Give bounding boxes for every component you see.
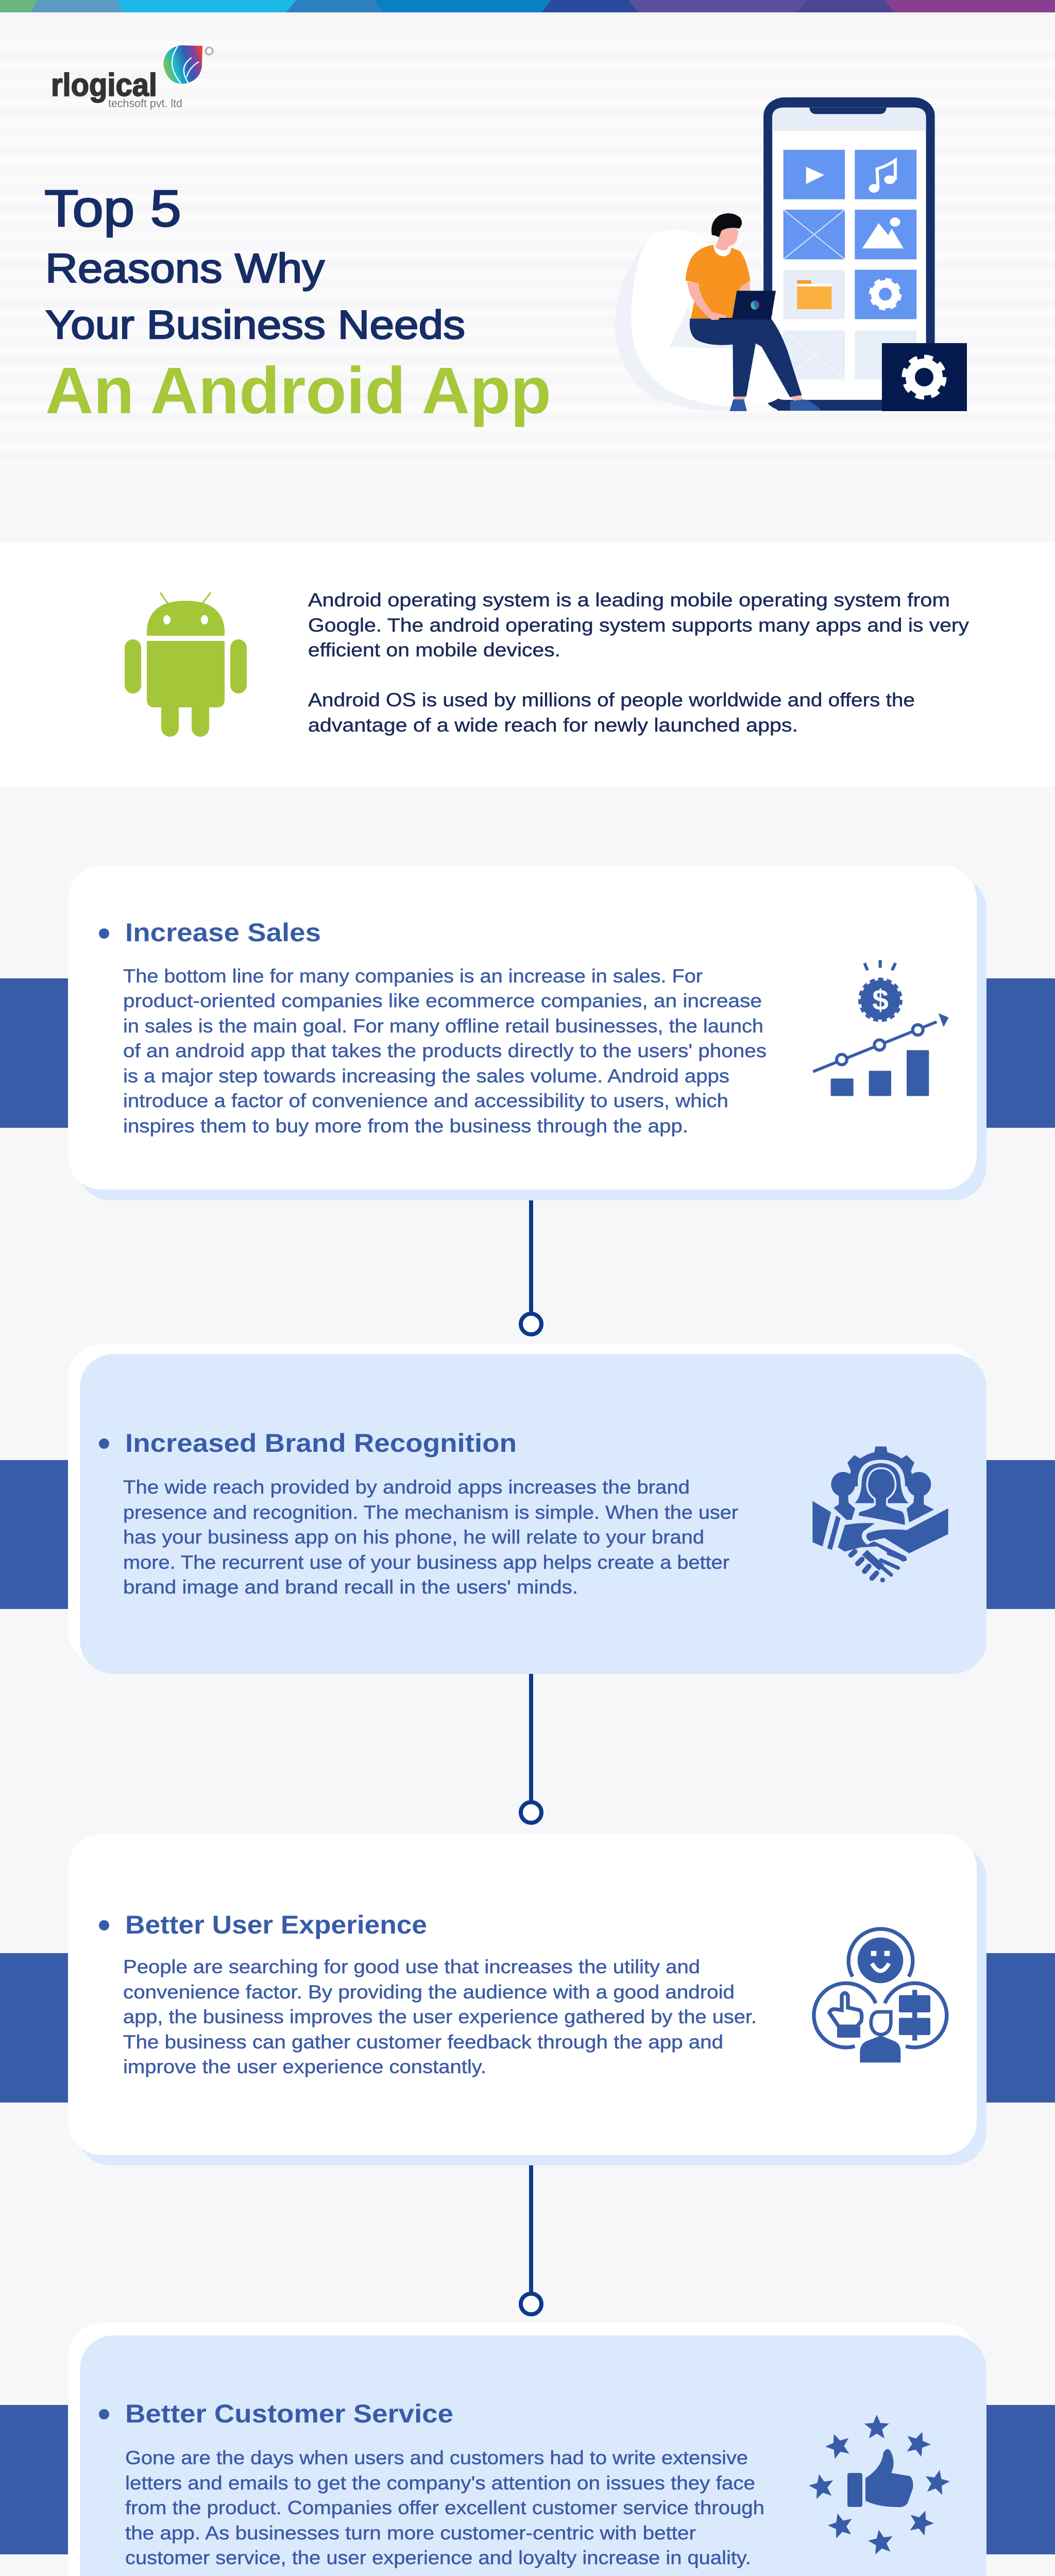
title: Your Business Needs — [45, 302, 465, 347]
body text: increase sales: is a major step towards increasing the sales volume. Android apps — [123, 1065, 729, 1087]
body text: user experience: app, the business improves the user experience gathered by the user. — [123, 2006, 757, 2027]
icon: thumbs up with stars — [807, 2415, 952, 2555]
settings box — [882, 343, 967, 411]
body text: user experience — [123, 1956, 757, 2077]
intro text: advantage of a wide reach for newly launched apps. — [308, 715, 798, 736]
body text: customer service: customer service, the user experience and loyalty increase in quality. — [125, 2547, 751, 2568]
heading: user experience: Better User Experience — [125, 1910, 427, 1939]
body text: customer service — [125, 2447, 764, 2568]
panel: increased brand recognition — [0, 1344, 1055, 1674]
top colour stripe — [0, 0, 1055, 12]
body text: brand recognition: has your business app on his phone, he will relate to your brand — [123, 1527, 704, 1548]
body text: brand recognition: presence and recognition. The mechanism is simple. When the user — [123, 1502, 738, 1523]
icon: user experience — [814, 1929, 947, 2062]
gear in phone tile — [871, 280, 900, 309]
body text: increase sales: introduce a factor of convenience and accessibility to users, which — [123, 1090, 728, 1111]
body text: customer service: letters and emails to get the company's attention on issues they face — [125, 2472, 755, 2494]
intro text: Android OS is used by millions of people worldwide and offers the — [308, 689, 915, 710]
icon: sales growth chart — [813, 960, 949, 1096]
logo: rlogical: techsoft pvt. ltd — [108, 97, 182, 110]
icon: android robot — [125, 592, 247, 737]
heading: brand recognition: Increased Brand Recognition — [125, 1429, 517, 1458]
body text: user experience: People are searching for good use that increases the utility and — [123, 1956, 700, 1977]
panel: better user experience — [0, 1834, 1055, 2165]
bean bag — [615, 230, 784, 411]
title — [44, 180, 551, 428]
connector 2 — [521, 1674, 541, 1823]
icon: team handshake — [812, 1447, 948, 1582]
body text: brand recognition: brand image and brand recall in the users' minds. — [123, 1577, 578, 1598]
panel: increase sales — [0, 866, 1055, 1200]
logo: rlogical: rlogical — [51, 67, 157, 103]
body text: brand recognition: more. The recurrent use of your business app helps create a better — [123, 1552, 729, 1573]
connector 1 — [521, 1200, 541, 1334]
icon: sales growth chart: $ — [872, 985, 889, 1017]
body text: increase sales: product-oriented companies like ecommerce companies, an increase — [123, 990, 762, 1011]
connector 3 — [521, 2165, 541, 2314]
intro text: efficient on mobile devices. — [308, 639, 560, 660]
intro text: Android operating system is a leading mobile operating system from — [308, 589, 950, 611]
intro text: Google. The android operating system supports many apps and is very — [308, 615, 969, 636]
title: Top 5 — [44, 180, 181, 238]
body text: customer service: the app. As businesses turn more customer-centric with better — [125, 2522, 696, 2544]
hero illustration: phone and person — [615, 97, 967, 411]
body text: increase sales: The bottom line for many companies is an increase in sales. For — [123, 965, 703, 987]
body text: user experience: improve the user experience constantly. — [123, 2056, 486, 2077]
logo: rlogical — [51, 45, 213, 110]
panel: intro — [0, 542, 1055, 787]
body text: customer service: from the product. Companies offer excellent customer service through — [125, 2497, 764, 2518]
title: An Android App — [45, 354, 551, 428]
phone — [763, 97, 935, 411]
body text: increase sales: in sales is the main goal. For many offline retail businesses, the launch — [123, 1015, 763, 1037]
panel: better customer service — [0, 2323, 1055, 2576]
body text: brand recognition: The wide reach provided by android apps increases the brand — [123, 1477, 690, 1498]
person — [686, 213, 821, 411]
heading: increase sales: Increase Sales — [125, 918, 321, 947]
title: Reasons Why — [45, 245, 325, 291]
heading: customer service: Better Customer Service — [125, 2399, 453, 2428]
body text: increase sales: inspires them to buy more from the business through the app. — [123, 1115, 688, 1137]
body text: brand recognition — [123, 1477, 738, 1598]
body text: increase sales: of an android app that takes the products directly to the users' phones — [123, 1040, 767, 1061]
intro text — [308, 589, 969, 736]
body text: user experience: The business can gather customer feedback through the app and — [123, 2031, 723, 2053]
body text: customer service: Gone are the days when users and customers had to write extensive — [125, 2447, 748, 2468]
body text: increase sales — [123, 965, 767, 1137]
body text: user experience: convenience factor. By providing the audience with a good android — [123, 1981, 735, 2003]
